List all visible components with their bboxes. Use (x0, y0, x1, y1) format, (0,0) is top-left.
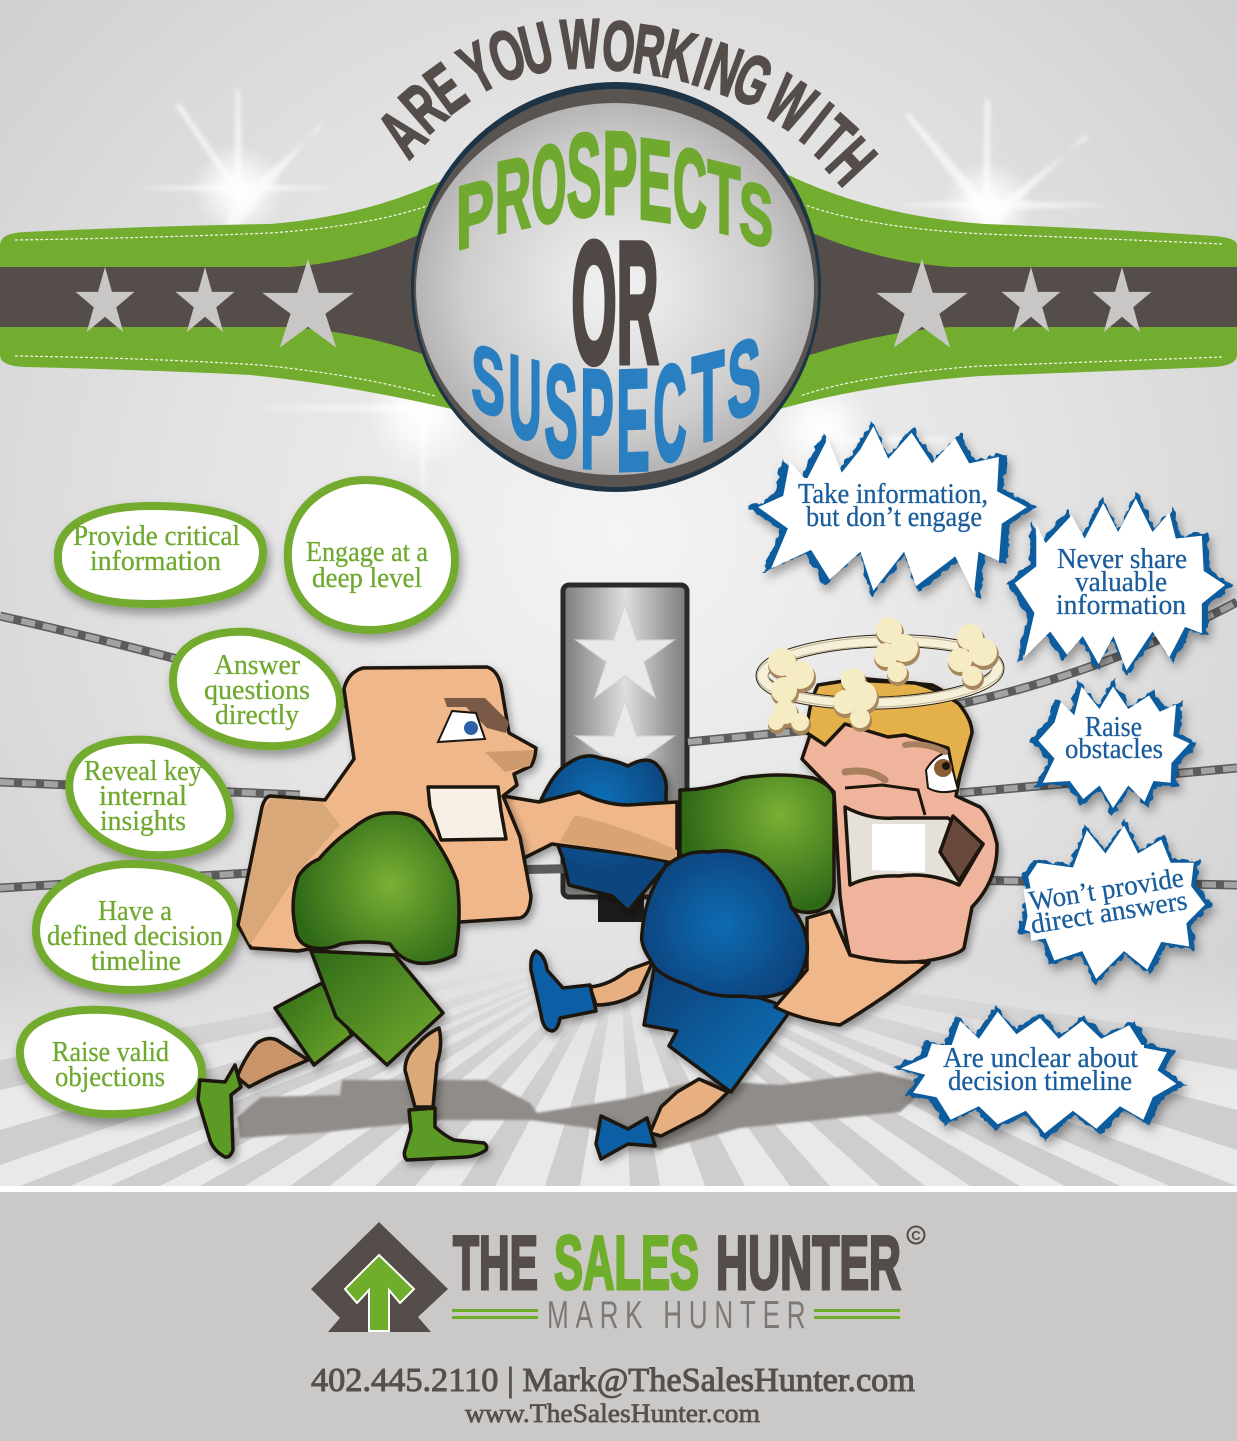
green front leg (405, 1028, 441, 1107)
burst: raise obstacles: obstacles (1065, 734, 1163, 765)
belt green lower right (770, 300, 1237, 412)
logo wordmark: SALES (554, 1221, 699, 1306)
burst: take information (748, 420, 1037, 600)
logo mark (311, 1222, 448, 1332)
copyright mark (908, 1226, 924, 1244)
green right glove (680, 775, 834, 912)
bubble: reveal key internal insights (69, 740, 230, 855)
floor shadows (237, 1072, 930, 1150)
cloud puffs (768, 619, 999, 735)
bubble: answer questions directly: questions (204, 674, 310, 706)
title: are you working with: E (412, 50, 481, 129)
suspect bubbles (748, 420, 1233, 1140)
green shorts (275, 951, 443, 1065)
title: are you working with (364, 5, 890, 200)
blue back leg (590, 961, 653, 1005)
prospect boxer (green) (198, 667, 536, 1160)
blue front shoe (596, 1116, 655, 1159)
blue hair (807, 680, 972, 789)
blue rear glove (541, 756, 666, 911)
title: prospects: E (638, 113, 672, 247)
blue front glove (642, 851, 807, 997)
dizzy ring of clouds (756, 617, 1004, 735)
title: are you working with: U (512, 8, 561, 91)
green nose shade (485, 750, 534, 772)
title: prospects (456, 107, 773, 270)
belt medallion (411, 82, 821, 492)
title: are you working with: K (656, 15, 703, 98)
burst: won't provide direct answers: Won’t provide (1027, 862, 1186, 917)
bubble: provide critical information: Provide critical (73, 520, 240, 552)
blue arm (775, 911, 929, 1025)
bubble: have a defined decision timeline: timeline (91, 945, 181, 977)
prospect bubbles (20, 480, 455, 1114)
bubble: have a defined decision timeline (36, 864, 236, 990)
post star lower (576, 700, 674, 794)
title: suspects: S (544, 336, 578, 486)
title: are you working with: I (788, 90, 845, 158)
green back boot (198, 1065, 241, 1157)
title: suspects: P (580, 341, 614, 500)
copyright mark: C (911, 1228, 921, 1243)
belt dark band (0, 232, 1237, 355)
bubble: reveal key internal insights: Reveal key (84, 755, 202, 787)
bubble: reveal key internal insights: insights (100, 805, 186, 837)
belt green upper right (778, 170, 1237, 300)
website: www.TheSalesHunter.com (465, 1399, 760, 1428)
bubble: have a defined decision timeline: Have a (98, 895, 172, 927)
blue back shoe (531, 951, 596, 1031)
ring ropes (0, 602, 1237, 888)
title: prospects: S (567, 109, 601, 243)
title: are you working with: W (753, 61, 828, 148)
title: are you working with: I (685, 24, 719, 102)
title: suspects: C (653, 335, 687, 492)
bubble: raise valid objections: Raise valid (52, 1036, 169, 1068)
ring floor with rays (0, 1008, 1237, 1186)
green front boot (404, 1108, 487, 1160)
title: are you working with: R (629, 11, 670, 92)
bubble: raise valid objections (20, 1010, 202, 1114)
logo tagline: MARK HUNTER (547, 1294, 812, 1337)
title: or: OR (572, 208, 658, 400)
title: prospects: P (603, 107, 637, 240)
green punching arm (503, 792, 677, 863)
footer (0, 1186, 1237, 1441)
title: are you working with: W (559, 5, 602, 84)
title: are you working with: H (812, 125, 890, 200)
title: are you working with: O (478, 14, 536, 98)
title: are you working with: G (722, 39, 783, 123)
burst: never share valuable information: information (1056, 590, 1186, 621)
championship belt (0, 170, 1237, 412)
bubble: answer questions directly (173, 632, 340, 746)
bubble: provide critical information (58, 506, 263, 604)
blue face (802, 678, 997, 962)
blue shorts (644, 963, 788, 1092)
logo wordmark: THE (453, 1221, 538, 1306)
green shoulder shading (240, 798, 340, 945)
burst: never share valuable information: valuable (1075, 567, 1167, 598)
burst: take information: but don’t engage (806, 502, 982, 533)
bubble: reveal key internal insights: internal (99, 780, 187, 812)
green eye (438, 711, 485, 742)
belt green upper left (0, 176, 452, 300)
green back leg (237, 1039, 308, 1087)
belt green lower left (0, 300, 460, 411)
stage flares (130, 90, 1115, 520)
burst: won't provide direct answers: direct answers (1029, 885, 1189, 940)
title: suspects (471, 313, 761, 501)
green left glove (293, 813, 459, 963)
bubble: engage at a deep level: deep level (312, 562, 422, 594)
bubble: provide critical information: information (90, 545, 221, 577)
post star top (576, 604, 674, 698)
burst: are unclear about decision timeline: Are unclear about (943, 1043, 1138, 1074)
blue front leg (650, 1079, 728, 1136)
title: suspects: S (471, 323, 505, 440)
title: suspects: S (727, 313, 761, 444)
bubble: engage at a deep level: Engage at a (306, 536, 428, 568)
title: are you working with: O (600, 7, 638, 87)
title: prospects: P (456, 159, 494, 270)
bubble: have a defined decision timeline: defined decision (47, 920, 223, 952)
burst: are unclear about decision timeline (892, 1005, 1185, 1140)
bubble: engage at a deep level (288, 480, 455, 630)
title: are you working with: Y (448, 28, 509, 109)
burst: raise obstacles: Raise (1085, 712, 1142, 743)
green torso and head (238, 667, 536, 951)
bubble: answer questions directly: Answer (214, 649, 300, 681)
title: prospects: T (708, 140, 740, 259)
corner post (563, 585, 687, 922)
bubble: answer questions directly: directly (215, 699, 299, 731)
logo wordmark (453, 1221, 901, 1306)
title: suspects: E (616, 339, 650, 501)
title: prospects: C (673, 123, 707, 252)
contact line: 402.445.2110 | Mark@TheSalesHunter.com (311, 1362, 915, 1399)
burst: are unclear about decision timeline: decision timeline (948, 1066, 1132, 1097)
title: suspects: T (692, 325, 724, 471)
belt stitching (15, 205, 1222, 396)
title: suspects: U (508, 329, 542, 467)
title: are you working with: T (797, 102, 868, 177)
blue mouth (845, 807, 983, 885)
burst: won't provide direct answers (1018, 820, 1212, 985)
green teeth (428, 787, 506, 840)
suspect boxer (blue) (503, 678, 997, 1159)
burst: never share valuable information: Never share (1057, 544, 1187, 575)
title: prospects: S (739, 162, 773, 268)
title: prospects: O (532, 120, 566, 248)
title: prospects: R (495, 135, 531, 257)
title: are you working with: N (696, 29, 751, 112)
burst: raise obstacles (1030, 680, 1198, 815)
title: are you working with: R (387, 69, 461, 148)
burst: take information: Take information, (798, 479, 988, 510)
burst: never share valuable information (1007, 492, 1233, 677)
bubble: raise valid objections: objections (55, 1061, 165, 1093)
logo tagline (452, 1294, 900, 1337)
belt stars (76, 259, 1151, 348)
title: are you working with: A (364, 96, 441, 172)
blue eye (845, 744, 958, 815)
green eyebrow (444, 698, 509, 733)
logo wordmark: HUNTER (716, 1221, 901, 1306)
